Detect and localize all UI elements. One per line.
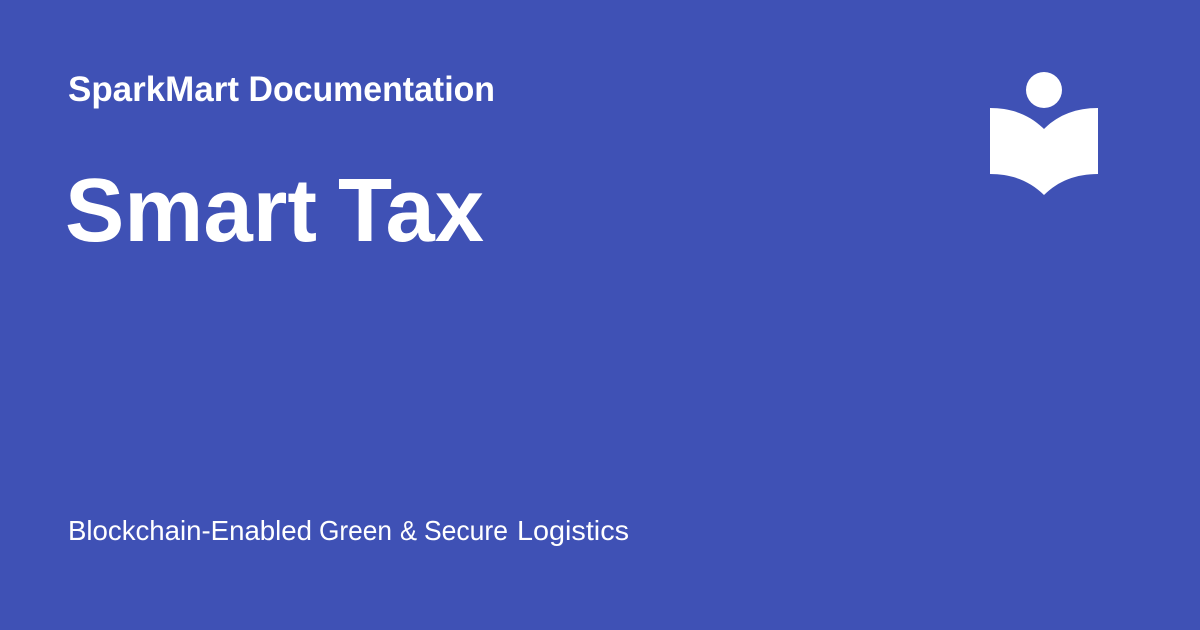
- subtitle: Logistics: [517, 515, 629, 546]
- page title: Tax: [338, 161, 484, 261]
- site name heading: SparkMart: [68, 70, 239, 109]
- site name heading: Documentation: [248, 70, 495, 109]
- subtitle: Green: [319, 515, 392, 546]
- subtitle: Secure: [424, 515, 508, 546]
- page title: [65, 161, 484, 261]
- subtitle: Blockchain-Enabled: [68, 515, 312, 546]
- page title: Smart: [65, 161, 317, 261]
- subtitle: [68, 515, 629, 546]
- subtitle: &: [400, 515, 417, 546]
- icon: reader with open book: [990, 72, 1098, 195]
- site name heading: [68, 70, 495, 109]
